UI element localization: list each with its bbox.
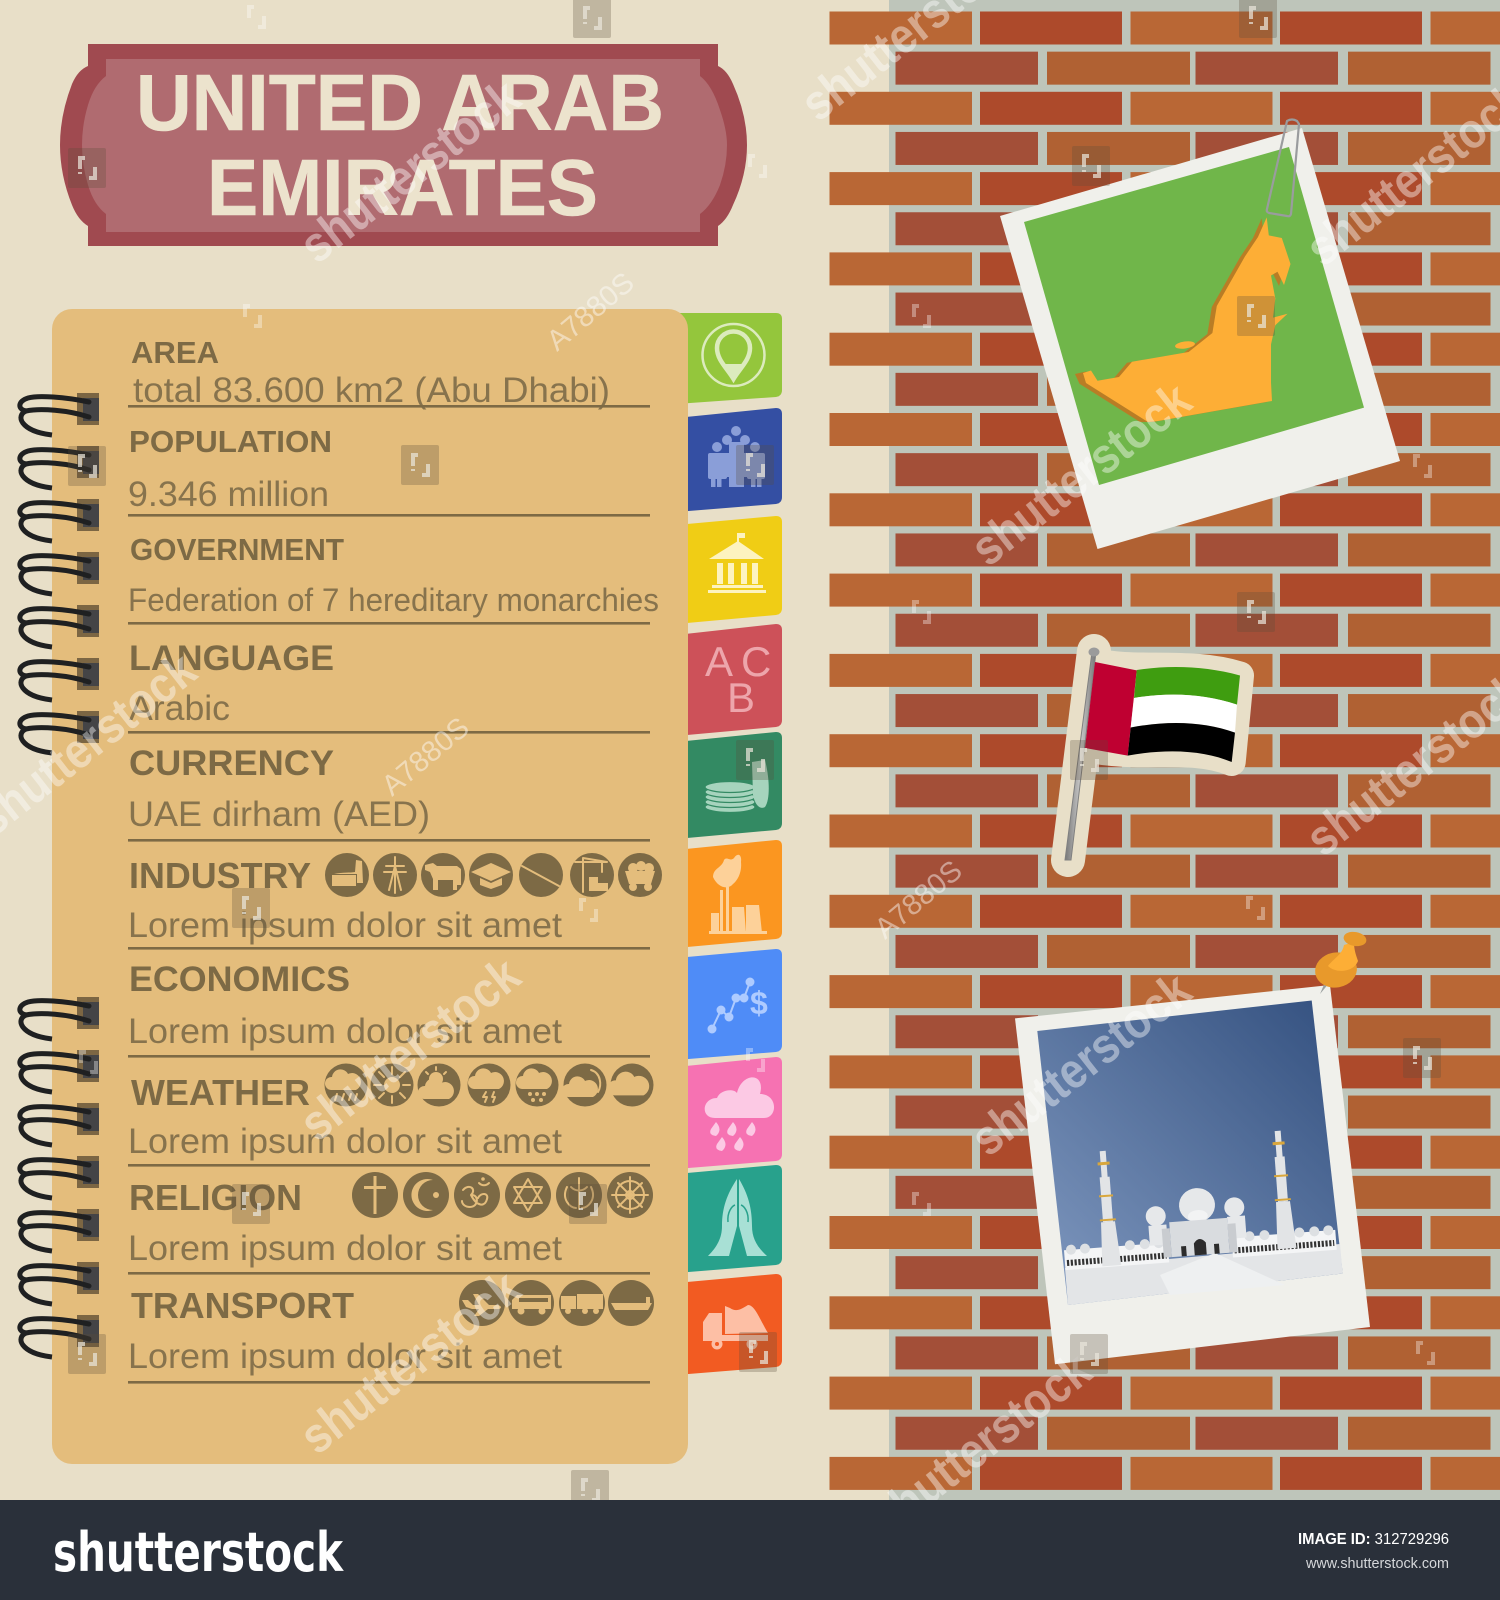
icons: transport xyxy=(459,1280,654,1326)
tab: transport xyxy=(676,1274,782,1375)
row: industry: INDUSTRY xyxy=(129,855,311,896)
title banner xyxy=(60,44,747,246)
row: population xyxy=(128,424,650,517)
footer url: www.shutterstock.com xyxy=(1305,1555,1449,1572)
row: weather xyxy=(128,1064,654,1167)
watermarks: shutterstock xyxy=(860,1341,1101,1547)
domes xyxy=(1144,1185,1247,1246)
flag red band xyxy=(1085,662,1137,756)
tab: area xyxy=(676,313,782,404)
photo: map of UAE xyxy=(1000,128,1400,549)
brick wall xyxy=(830,0,1500,1500)
icon: letters xyxy=(705,638,771,721)
tab: industry xyxy=(676,840,782,948)
row: religion: Lorem ipsum dolor sit amet xyxy=(128,1229,562,1268)
icon: rain cloud xyxy=(705,1077,774,1151)
flag black band xyxy=(1128,723,1235,762)
row: weather: WEATHER xyxy=(131,1072,310,1113)
tab: language xyxy=(676,624,782,736)
row: currency: CURRENCY xyxy=(129,744,334,783)
row: transport xyxy=(128,1280,654,1384)
mosque xyxy=(1056,1127,1337,1270)
walls xyxy=(1064,1225,1337,1270)
tab: population xyxy=(676,408,782,512)
watermarks: shutterstock xyxy=(289,68,530,274)
icon: location pin xyxy=(702,324,764,386)
tab: currency xyxy=(676,732,782,839)
watermarks: A7880S xyxy=(869,855,969,945)
minarets xyxy=(1093,1130,1297,1266)
spiral binding: upper xyxy=(20,393,99,753)
photo: mosque xyxy=(1015,985,1370,1364)
row: industry: Lorem ipsum dolor sit amet xyxy=(128,906,562,945)
flag white band xyxy=(1131,695,1237,733)
row: population: 9.346 million xyxy=(128,475,329,514)
flag green band xyxy=(1134,667,1240,705)
row: area xyxy=(128,335,650,410)
flag sticker backing xyxy=(1068,651,1240,860)
watermarks: shutterstock xyxy=(289,1259,530,1465)
row: religion xyxy=(128,1172,653,1275)
icons: industry xyxy=(325,853,662,897)
title: UNITED ARAB xyxy=(136,58,664,147)
row: government xyxy=(128,532,659,625)
row: government: Federation of 7 hereditary monarchies xyxy=(128,582,659,618)
row: weather: Lorem ipsum dolor sit amet xyxy=(128,1122,562,1161)
island xyxy=(1175,340,1195,350)
icon: dump truck xyxy=(703,1305,768,1350)
row: area: AREA xyxy=(131,335,219,370)
title xyxy=(136,58,664,232)
row: transport: Lorem ipsum dolor sit amet xyxy=(128,1337,562,1376)
watermarks: A7880S xyxy=(376,712,476,802)
row: currency: UAE dirham (AED) xyxy=(128,795,430,834)
footer bar xyxy=(0,1500,1500,1600)
tab: government xyxy=(676,516,782,624)
watermarks: shutterstock xyxy=(960,371,1201,577)
row: transport: TRANSPORT xyxy=(131,1285,354,1326)
ground xyxy=(1065,1244,1343,1305)
flag of UAE xyxy=(1065,648,1240,860)
push pin xyxy=(1312,930,1368,994)
row: language xyxy=(128,639,650,734)
row: economics xyxy=(128,960,650,1058)
notebook panel xyxy=(52,309,688,1464)
row: industry xyxy=(128,853,662,950)
icon: letters: A xyxy=(705,638,733,685)
row: economics: ECONOMICS xyxy=(129,960,350,999)
icon: government building xyxy=(708,533,766,593)
index tabs xyxy=(676,313,782,1375)
title: EMIRATES xyxy=(207,143,598,232)
icon: people xyxy=(708,426,765,487)
flag pole xyxy=(1065,652,1096,860)
central hall xyxy=(1161,1217,1238,1258)
footer image id: IMAGE ID: 312729296 xyxy=(1298,1531,1449,1548)
row: area: total 83.600 km2 (Abu Dhabi) xyxy=(133,371,610,410)
spiral binding: lower xyxy=(20,997,99,1357)
watermarks: shutterstock xyxy=(289,946,530,1152)
icon: factory xyxy=(709,855,767,934)
row: economics: Lorem ipsum dolor sit amet xyxy=(128,1012,562,1051)
icon: coins xyxy=(705,760,769,812)
watermarks: A7880S xyxy=(541,267,641,357)
row: language: Arabic xyxy=(129,689,230,728)
icons: religion xyxy=(352,1172,653,1218)
map of UAE xyxy=(1083,217,1290,422)
row: religion: RELIGION xyxy=(129,1177,302,1218)
watermarks: shutterstock xyxy=(960,961,1201,1167)
tab: religion xyxy=(676,1165,782,1273)
icon: praying hands xyxy=(708,1179,767,1256)
paperclip xyxy=(1267,120,1299,216)
row: population: POPULATION xyxy=(129,424,332,459)
footer logo: shutterstock xyxy=(53,1521,344,1584)
icon: chart with dollar: $ xyxy=(750,985,768,1021)
icon: letters: C xyxy=(741,638,771,685)
tab: weather xyxy=(676,1057,782,1169)
row: language: LANGUAGE xyxy=(129,639,334,678)
icons: weather xyxy=(324,1064,654,1106)
row: currency xyxy=(128,744,650,842)
tab: economics xyxy=(676,949,782,1060)
map shadow xyxy=(1075,218,1286,422)
row: government: GOVERNMENT xyxy=(130,532,344,567)
icon: letters: B xyxy=(727,674,755,721)
